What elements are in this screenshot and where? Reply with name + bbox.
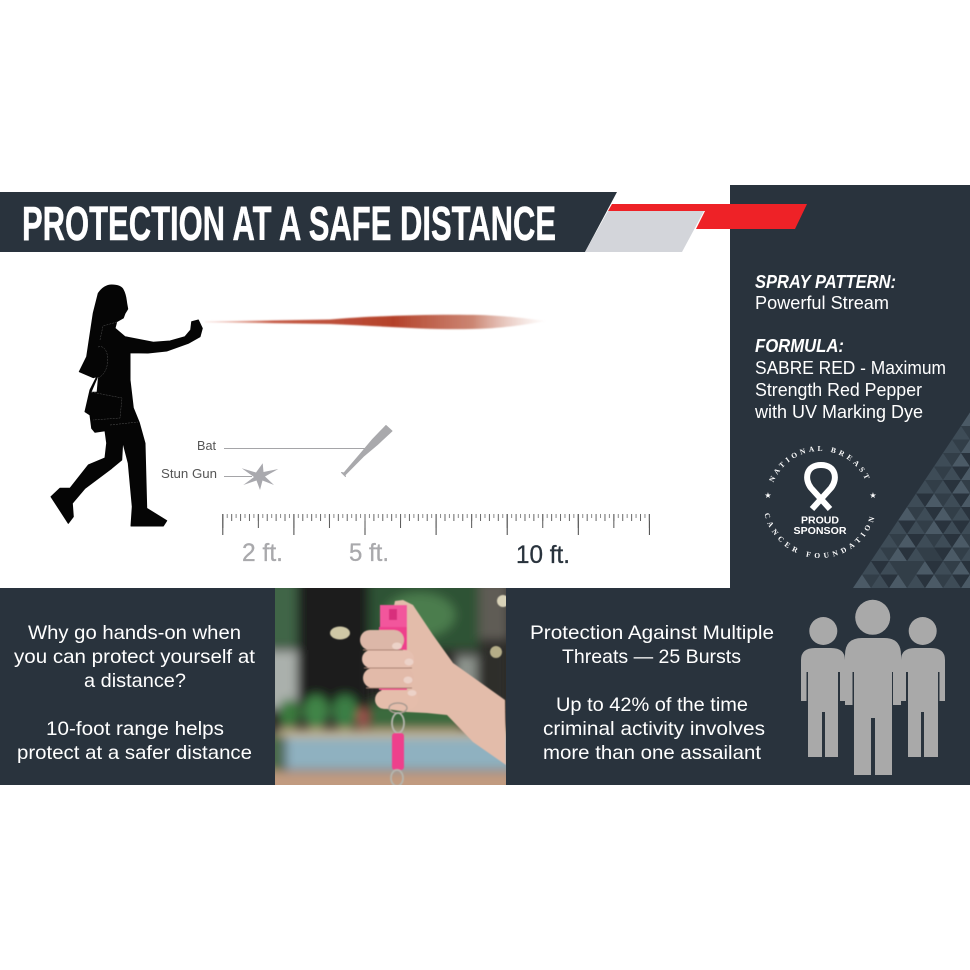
panel: right specs background [730,185,970,588]
title: PROTECTION AT A SAFE DISTANCE [22,198,556,251]
left callout text: Why go hands-on when [28,622,241,644]
header bar [0,192,617,252]
left callout text: protect at a safer distance [17,742,252,764]
photo: hand holding pink pepper spray [275,588,506,785]
spray pattern text: SPRAY PATTERN: [755,271,896,292]
label: stun gun [161,466,252,481]
badge: proud sponsor [764,446,877,558]
ruler label: 10 ft: 10 ft. [516,541,570,569]
formula text [754,335,946,422]
badge: proud sponsor: SPONSOR [794,526,847,537]
formula text: SABRE RED - Maximum [755,357,946,378]
left callout text: a distance? [84,670,186,692]
right callout text: Threats — 25 Bursts [562,646,741,668]
grey stripe [585,211,704,252]
distance ruler [222,514,650,535]
badge: proud sponsor: ★ [869,491,877,500]
left callout text: 10-foot range helps [46,718,224,740]
label: stun gun: Stun Gun [161,466,217,481]
woman silhouette [51,285,202,526]
spray stream [205,315,546,329]
panel: bottom band [0,588,970,785]
left callout text [14,622,256,764]
icon: group of three people [801,600,945,775]
label: bat: Bat [197,438,216,453]
badge: proud sponsor: PROUD [801,516,839,526]
triangle pattern [853,412,970,588]
icon: bat [342,426,392,476]
formula text: with UV Marking Dye [754,401,923,422]
ruler label: 2 ft: 2 ft. [242,539,283,567]
formula text: Strength Red Pepper [755,379,922,400]
badge: proud sponsor: NATIONAL BREAST [768,446,870,482]
right callout text: more than one assailant [543,742,762,764]
ruler label: 5 ft: 5 ft. [349,539,389,567]
icon: stun gun spark [242,463,278,490]
left callout text: you can protect yourself at [14,646,256,668]
spray pattern text: Powerful Stream [755,292,889,313]
spray pattern text [755,271,896,313]
right callout text: Up to 42% of the time [556,694,748,716]
badge: proud sponsor: ★ [764,491,772,500]
formula text: FORMULA: [755,335,844,356]
right callout text: criminal activity involves [543,718,765,740]
right callout text [530,622,774,764]
red stripe [608,204,807,229]
right callout text: Protection Against Multiple [530,622,774,644]
badge: proud sponsor: CANCER FOUNDATION [764,513,874,558]
